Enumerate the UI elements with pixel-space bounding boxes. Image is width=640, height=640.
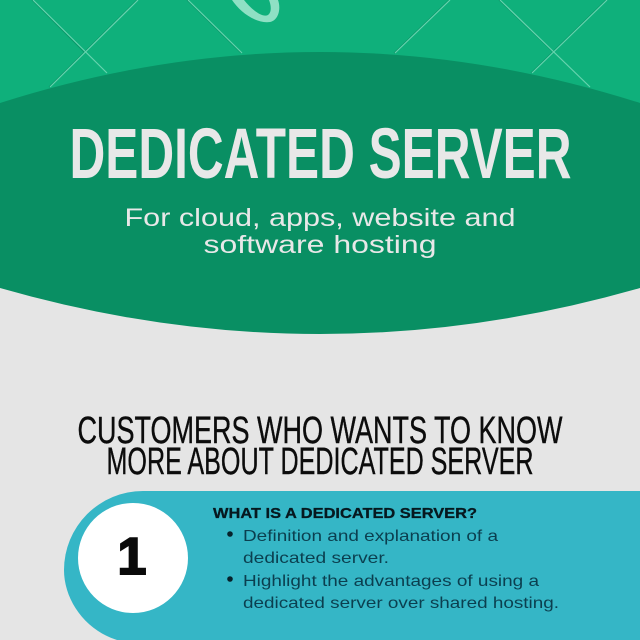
subtitle: [124, 204, 516, 259]
dark green ellipse banner: [0, 52, 640, 334]
bullet list: [227, 528, 559, 612]
number circle: 1: [118, 528, 146, 586]
panel: item 1: [64, 491, 640, 640]
bullet list: dedicated server.: [243, 550, 389, 567]
icon: cropped loop ornament: [232, 0, 279, 22]
bullet list: dedicated server over shared hosting.: [243, 595, 559, 612]
header green band: [0, 0, 640, 170]
section heading: [78, 410, 563, 483]
bullet list: Highlight the advantages of using a: [243, 573, 539, 590]
number circle: [78, 503, 188, 613]
item heading: WHAT IS A DEDICATED SERVER?: [213, 505, 477, 522]
subtitle: For cloud, apps, website and: [124, 204, 516, 232]
subtitle: software hosting: [204, 231, 436, 259]
bullet list: Definition and explanation of a: [243, 528, 498, 545]
